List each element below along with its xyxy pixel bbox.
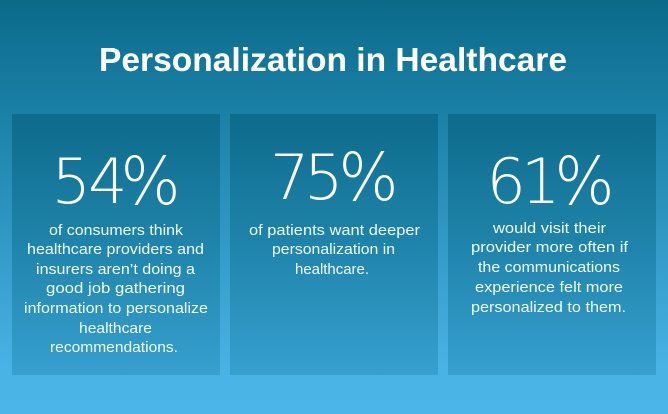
description: consumers: insurers aren’t doing a bbox=[36, 261, 196, 278]
description: consumers: good job gathering bbox=[46, 280, 185, 297]
title: Personalization in Healthcare bbox=[99, 41, 567, 78]
stat: 61%: 61 bbox=[486, 145, 560, 218]
description: consumers: of consumers think bbox=[49, 222, 184, 239]
description: consumers: recommendations. bbox=[50, 339, 178, 356]
panel: 75% of patients bbox=[230, 114, 438, 375]
stat: 61% bbox=[486, 143, 614, 220]
description: would visit: provider more often if bbox=[471, 239, 629, 256]
description: patients bbox=[249, 222, 420, 278]
panel: 61% would visit bbox=[448, 114, 656, 375]
description: consumers: information to personalize bbox=[24, 300, 208, 317]
description: would visit: personalized to them. bbox=[471, 299, 626, 316]
stat: 75%: 75 bbox=[270, 141, 343, 214]
description: would visit: would visit their bbox=[492, 220, 606, 237]
stat: 75% bbox=[270, 139, 398, 216]
stat: 54%: % bbox=[120, 143, 180, 220]
description: would visit: experience felt more bbox=[475, 279, 623, 296]
panel: 54% of consumers bbox=[12, 114, 220, 375]
stat: 54%: 54 bbox=[52, 145, 127, 218]
description: would visit: the communications bbox=[478, 259, 620, 276]
description: consumers: healthcare bbox=[79, 320, 152, 337]
description: patients: healthcare. bbox=[295, 261, 369, 278]
description: patients: personalization in bbox=[272, 241, 395, 258]
description: consumers bbox=[24, 222, 208, 356]
stat: 75%: % bbox=[338, 139, 398, 216]
description: patients: of patients want deeper bbox=[249, 222, 420, 239]
description: consumers: healthcare providers and bbox=[27, 241, 204, 258]
description: would visit bbox=[471, 220, 629, 316]
stat: 61%: % bbox=[554, 143, 614, 220]
stat: 54% bbox=[52, 143, 180, 220]
